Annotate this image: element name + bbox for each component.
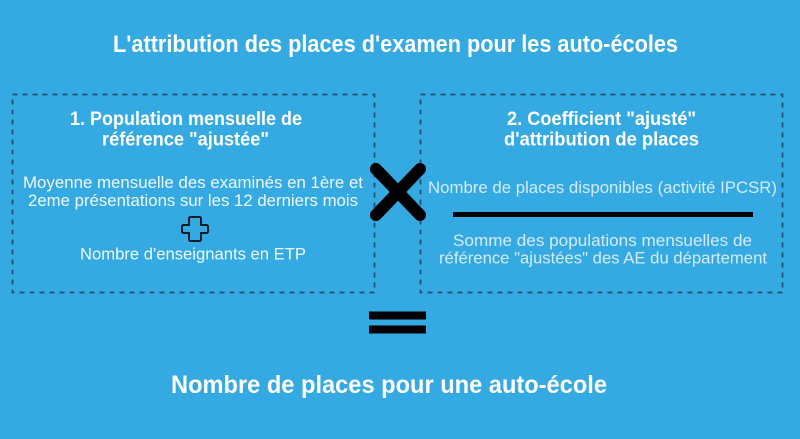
panel 1 description [23,173,363,210]
panel 1 description: Moyenne mensuelle des examinés en 1ère et [23,173,363,192]
panel 1 description: 2eme présentations sur les 12 derniers mois [28,191,358,210]
denominator [439,231,767,268]
panel 2 heading: d'attribution de places [504,128,699,150]
denominator: référence "ajustées" des AE du département [439,248,767,268]
panel 1 heading [70,108,302,150]
icon: plus [182,217,208,241]
panel 1 heading: référence "ajustée" [102,128,269,150]
icon: multiplication sign [376,169,420,215]
icon: equals sign [369,312,426,334]
panel 1 heading: 1. Population mensuelle de [70,108,302,130]
fraction bar [453,212,753,217]
numerator: Nombre de places disponibles (activité IPCSR) [428,178,777,197]
title: L'attribution des places d'examen pour les auto-écoles [113,31,678,58]
second term: Nombre d'enseignants en ETP [80,244,306,264]
panel: coefficient ajusté [420,94,782,292]
panel: population mensuelle de référence [12,94,374,292]
result: Nombre de places pour une auto-école [171,371,607,399]
denominator: Somme des populations mensuelles de [453,231,752,250]
panel 2 heading [504,108,699,150]
panel 2 heading: 2. Coefficient "ajusté" [507,108,696,130]
